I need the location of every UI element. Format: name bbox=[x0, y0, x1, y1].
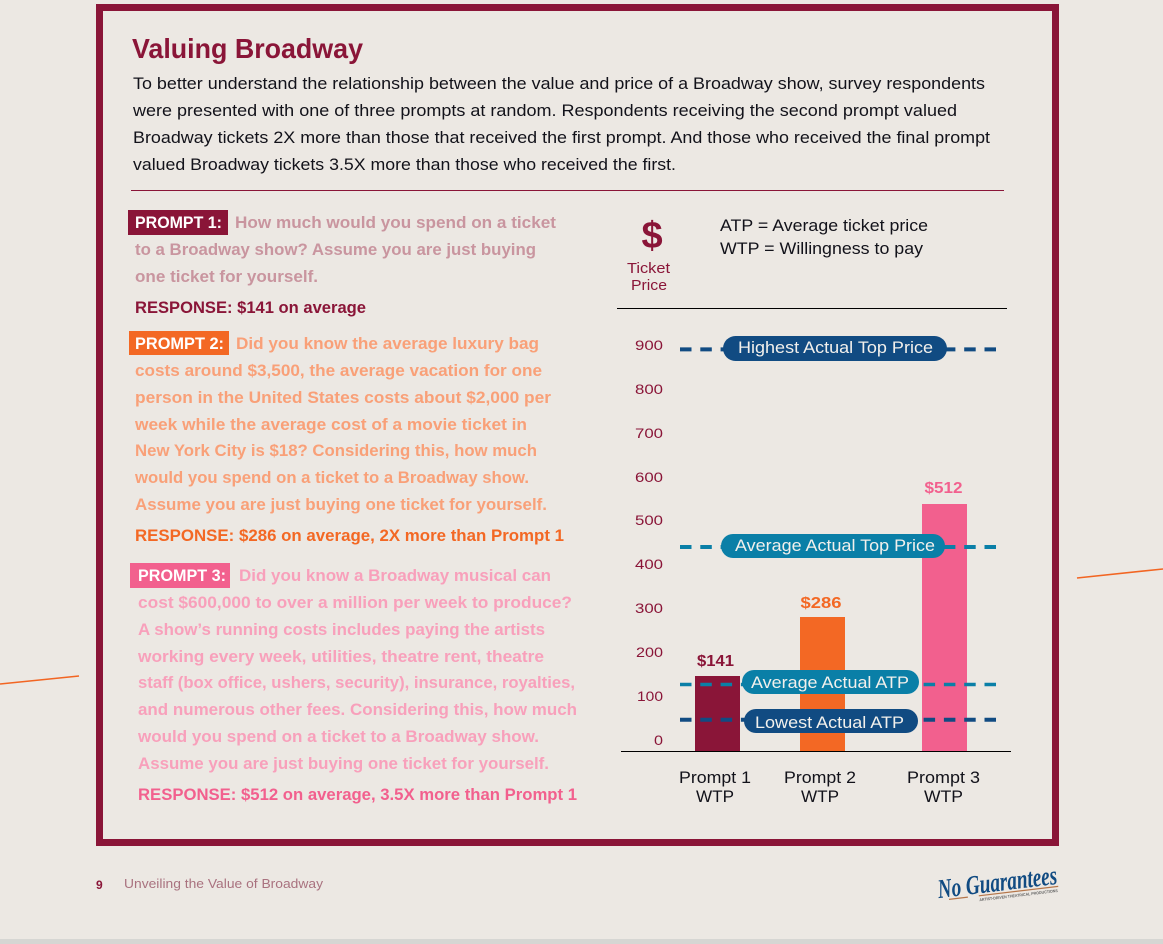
y axis labels: 200 bbox=[636, 644, 663, 660]
prompt 3 question: Did you know a Broadway musical can bbox=[239, 566, 551, 585]
value label: $141: $141 bbox=[697, 653, 734, 670]
logo: No Guarantees bbox=[935, 860, 1059, 907]
prompt 3 tag bbox=[130, 563, 230, 588]
intro paragraph: To better understand the relationship between the value and price of a Broadway show, survey respondents bbox=[133, 74, 985, 93]
prompt 2 question: New York City is $18? Considering this, how much bbox=[135, 441, 537, 460]
panel: prompt 1 bbox=[128, 210, 556, 317]
reference line: lowest actual ATP bbox=[680, 709, 997, 733]
y axis labels: 400 bbox=[635, 556, 663, 572]
y axis labels: 800 bbox=[635, 381, 663, 397]
prompt 3 question: staff (box office, ushers, security), insurance, royalties, bbox=[138, 673, 575, 692]
prompt 2 question: Did you know the average luxury bag bbox=[236, 334, 539, 353]
prompt 3 question: cost $600,000 to over a million per week to produce? bbox=[138, 593, 572, 612]
y axis labels: 300 bbox=[635, 600, 663, 616]
bar: prompt 1 bbox=[695, 676, 740, 751]
panel: prompt 3 bbox=[130, 563, 577, 804]
reference line: average actual ATP bbox=[680, 670, 997, 694]
intro paragraph: Broadway tickets 2X more than those that received the first prompt. And those who received the final prompt bbox=[133, 128, 990, 147]
intro paragraph: were presented with one of three prompts at random. Respondents receiving the second prompt valued bbox=[132, 101, 957, 120]
value label: $512: $512 bbox=[924, 480, 963, 497]
panel: prompt 2 bbox=[129, 331, 564, 545]
prompt 2 response: RESPONSE: $286 on average, 2X more than Prompt 1 bbox=[135, 526, 564, 545]
y axis labels: 700 bbox=[635, 425, 663, 441]
logo: No Guarantees: ARTIST-DRIVEN THEATRICAL PRODUCTIONS bbox=[979, 888, 1058, 902]
intro paragraph bbox=[132, 74, 990, 174]
y axis labels: 900 bbox=[635, 337, 663, 353]
x axis labels: Prompt 1 bbox=[679, 768, 751, 787]
y axis labels: 500 bbox=[635, 512, 663, 528]
x axis labels: Prompt 2 bbox=[784, 768, 856, 787]
footer: page number: 9 bbox=[96, 878, 103, 892]
x axis labels: WTP bbox=[696, 787, 734, 806]
x axis labels bbox=[679, 768, 980, 806]
prompt 2 question: person in the United States costs about $2,000 per bbox=[135, 388, 551, 407]
prompt 2 question: would you spend on a ticket to a Broadway show. bbox=[134, 468, 529, 487]
prompt 3 response: RESPONSE: $512 on average, 3.5X more than Prompt 1 bbox=[138, 785, 577, 804]
icon: ticket price dollar sign bbox=[627, 215, 671, 294]
prompt 2 question: costs around $3,500, the average vacation for one bbox=[135, 361, 542, 380]
intro paragraph: valued Broadway tickets 3.5X more than those who received the first. bbox=[133, 155, 676, 174]
prompt 1 question: How much would you spend on a ticket bbox=[235, 213, 556, 232]
prompt 1 question bbox=[135, 213, 556, 286]
panel: Valuing Broadway frame bbox=[100, 8, 1056, 842]
icon: ticket price dollar sign: Ticket bbox=[627, 260, 671, 277]
y axis labels: 100 bbox=[637, 688, 663, 704]
legend: abbreviations: ATP = Average ticket price bbox=[720, 216, 928, 235]
prompt 2 tag: PROMPT 2: bbox=[135, 334, 224, 353]
prompt 3 question: working every week, utilities, theatre rent, theatre bbox=[137, 647, 544, 666]
prompt 1 response: RESPONSE: $141 on average bbox=[135, 298, 366, 317]
prompt 3 question: A show’s running costs includes paying the artists bbox=[138, 620, 545, 639]
reference line: highest actual top price: Highest Actual Top Price bbox=[738, 338, 933, 357]
prompt 1 question: to a Broadway show? Assume you are just buying bbox=[135, 240, 536, 259]
legend: abbreviations: WTP = Willingness to pay bbox=[720, 239, 924, 258]
prompt 1 question: one ticket for yourself. bbox=[135, 267, 318, 286]
prompt 2 question: Assume you are just buying one ticket for yourself. bbox=[135, 495, 547, 514]
footer: document title: Unveiling the Value of Broadway bbox=[124, 876, 324, 891]
prompt 2 question: week while the average cost of a movie ticket in bbox=[134, 415, 527, 434]
y axis labels: 600 bbox=[635, 469, 663, 485]
prompt 3 question: Assume you are just buying one ticket for yourself. bbox=[138, 754, 549, 773]
y axis labels bbox=[635, 337, 663, 748]
bar: prompt 3 bbox=[922, 504, 967, 751]
prompt 3 tag: PROMPT 3: bbox=[138, 566, 226, 585]
icon: ticket price dollar sign: Price bbox=[631, 277, 667, 294]
logo: No Guarantees: No Guarantees bbox=[935, 860, 1059, 904]
bar: prompt 2 bbox=[800, 617, 845, 751]
reference line: average actual ATP: Average Actual ATP bbox=[751, 673, 909, 692]
x axis labels: Prompt 3 bbox=[907, 768, 980, 787]
reference line: average actual top price bbox=[680, 534, 997, 558]
bar chart: willingness to pay bbox=[621, 336, 1011, 806]
value label: $286: $286 bbox=[800, 595, 842, 612]
prompt 3 question: and numerous other fees. Considering this, how much bbox=[138, 700, 577, 719]
title: Valuing Broadway bbox=[132, 33, 363, 64]
reference line: lowest actual ATP: Lowest Actual ATP bbox=[755, 713, 904, 732]
prompt 1 tag: PROMPT 1: bbox=[135, 213, 222, 232]
x axis labels: WTP bbox=[801, 787, 839, 806]
reference line: highest actual top price bbox=[680, 336, 997, 361]
prompt 3 question: would you spend on a ticket to a Broadway show. bbox=[137, 727, 539, 746]
prompt 3 question bbox=[137, 566, 577, 773]
legend: abbreviations bbox=[720, 216, 928, 258]
prompt 2 question bbox=[134, 334, 551, 514]
y axis labels: 0 bbox=[654, 732, 663, 748]
x axis labels: WTP bbox=[924, 787, 963, 806]
reference line: average actual top price: Average Actual Top Price bbox=[735, 536, 935, 555]
icon: ticket price dollar sign: $ bbox=[642, 215, 663, 257]
